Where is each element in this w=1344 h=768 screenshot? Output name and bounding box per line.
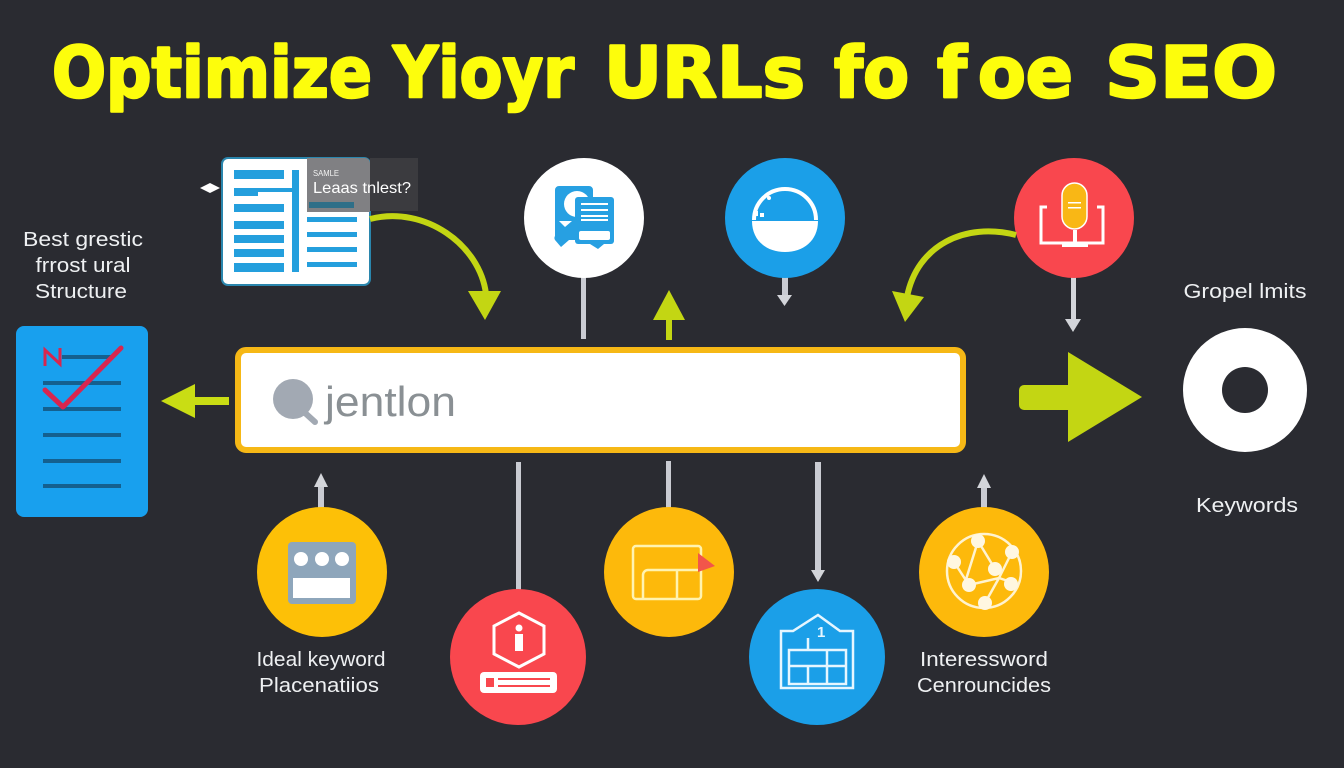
text: keyword placement label: Ideal keyword [256, 649, 386, 671]
icon: blue building circle [749, 462, 885, 725]
icon: yellow panel circle [257, 473, 387, 637]
text: keywords label: Keywords [1196, 495, 1298, 517]
icon: white chat circle [524, 158, 644, 339]
text: keyword placement label [256, 649, 386, 697]
arrow: green up [653, 290, 685, 340]
icon: blue building circle: 1 [817, 624, 825, 641]
icon: document with tooltip: Leaas tnlest? [313, 180, 411, 197]
icon: blue bowl circle [725, 158, 845, 306]
arrow: green left [161, 384, 229, 418]
title: SEO [1105, 32, 1277, 114]
icon: blue checklist document [16, 326, 148, 517]
title: fo [834, 32, 909, 114]
icon: yellow network circle [919, 474, 1049, 637]
title: Optimize [52, 32, 372, 114]
icon: white donut [1183, 328, 1307, 452]
search bar [238, 350, 963, 450]
text: interest label: Cenrouncides [917, 675, 1051, 697]
text: best structure label: Best grestic [23, 229, 143, 251]
text: keyword placement label: Placenatiios [259, 675, 379, 697]
text: interest label [917, 649, 1051, 697]
arrow: curved green from microphone [892, 231, 1016, 322]
text: interest label: Interessword [920, 649, 1048, 671]
title: Yioyr [392, 32, 574, 114]
title: f [937, 32, 969, 114]
text: best structure label: frrost ural [36, 255, 130, 277]
icon: document with tooltip: SAMLE [313, 169, 339, 178]
icon: red info circle [450, 462, 586, 725]
arrow: curved green from document [370, 216, 501, 320]
text: limits label: Gropel lmits [1184, 281, 1306, 303]
text: best structure label [23, 229, 143, 303]
icon: document with tooltip [200, 158, 418, 285]
title [52, 32, 1277, 114]
arrow: green right [1019, 352, 1142, 442]
icon: magnifier [273, 379, 315, 422]
icon: red microphone circle [1014, 158, 1134, 332]
icon: yellow window circle [604, 461, 734, 637]
search text: jentlon [323, 378, 456, 425]
title: URLs [604, 32, 805, 114]
title: oe [978, 32, 1073, 114]
text: best structure label: Structure [35, 281, 127, 303]
